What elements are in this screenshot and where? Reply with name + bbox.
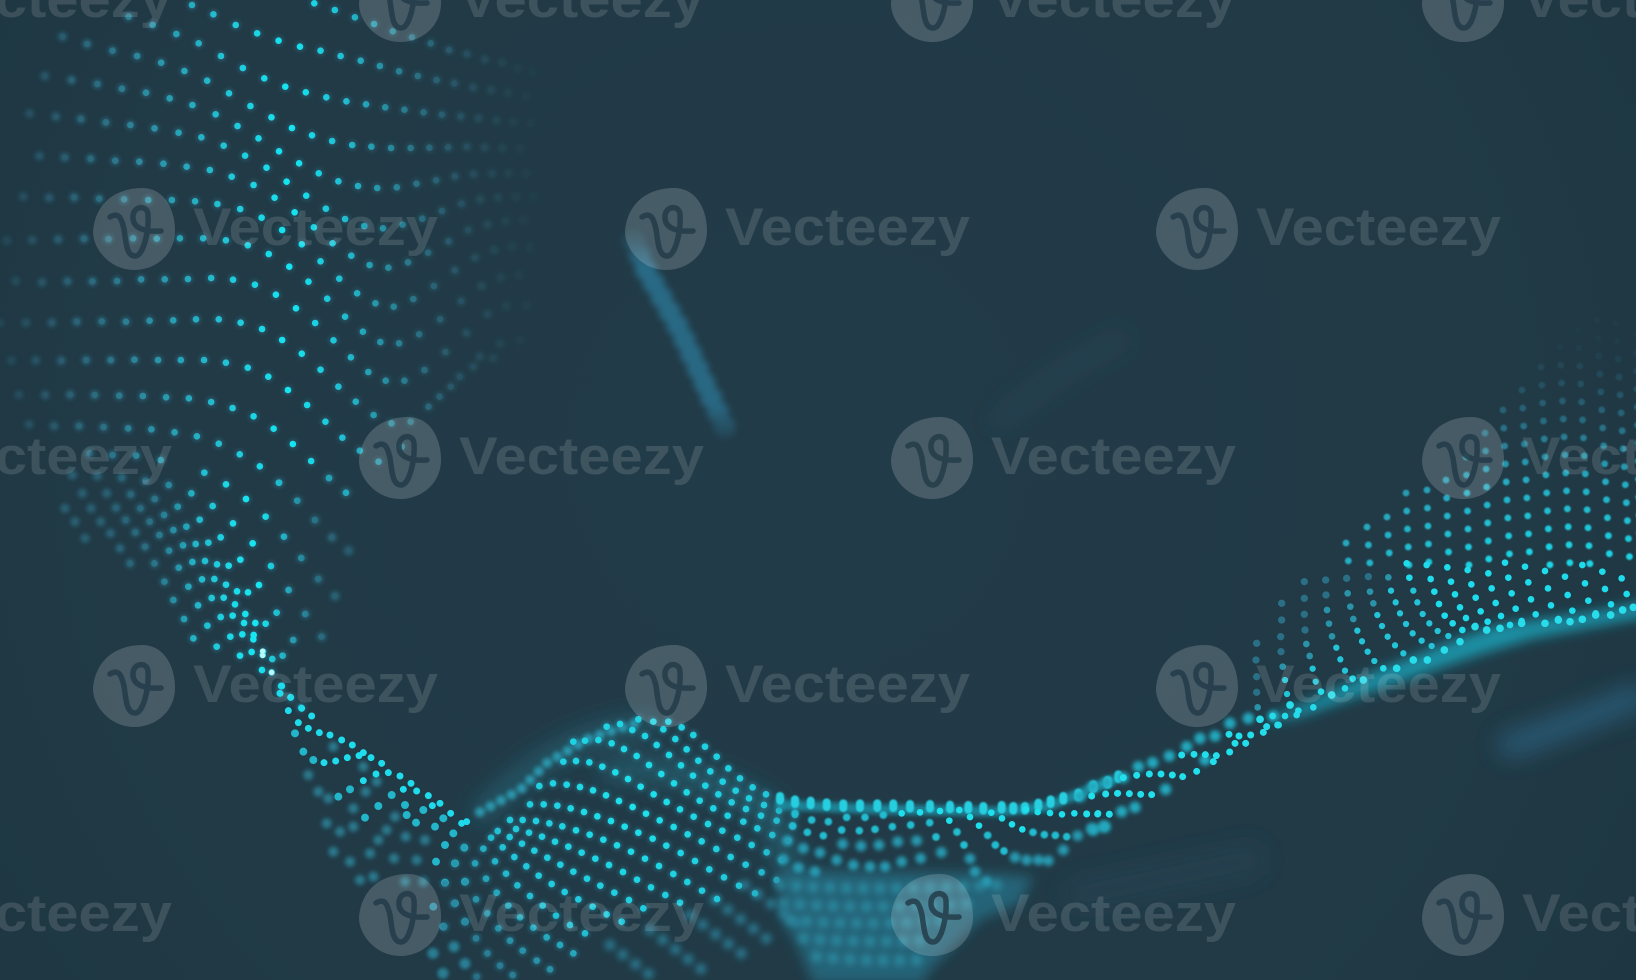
- left sheet edge dots: [280, 686, 467, 927]
- watermark row 5: Vecteezy: [459, 884, 705, 943]
- watermark row 1: [0, 0, 1636, 42]
- blurred diagonal dot streak: [634, 240, 727, 432]
- watermark row 2: [93, 188, 1502, 270]
- watermark row 4: Vecteezy: [1256, 655, 1502, 714]
- dot field: converging chevrons to the narrow ridge: [65, 473, 349, 707]
- watermark row 5: Vecteezy: [991, 884, 1237, 943]
- blurred layer of the central hump: [432, 719, 795, 977]
- faint blurred bands: [1000, 340, 1636, 895]
- watermark row 3: Vecteezy: [991, 427, 1237, 486]
- watermark row 2: Vecteezy: [193, 198, 439, 257]
- lower-right blurred plume: [780, 870, 1033, 980]
- watermark row 5: [0, 874, 1636, 956]
- dot field: right fan lower arcs and ridge: [1256, 563, 1633, 732]
- watermark row 3: Vecteezy: [459, 427, 705, 486]
- scalloped rows under the lower ridge: [780, 774, 1118, 851]
- blurred far dots of upper-left sheet: [0, 3, 533, 707]
- dim blurred lower rows of the hump: [610, 885, 800, 975]
- watermark row 4: Vecteezy: [725, 655, 971, 714]
- dot field: right fan upper columns: [1346, 320, 1636, 566]
- dot field: upper-left wave sheet: [0, 3, 533, 493]
- blurred back edge of the hump: [480, 722, 640, 812]
- blurred dots of the ridge link: [1080, 716, 1273, 830]
- sharp dots along the lower ridge: [902, 793, 1117, 829]
- watermark row 4: Vecteezy: [193, 655, 439, 714]
- sharp dots of the ridge link: [1087, 719, 1278, 814]
- dot field: central hump: [432, 719, 795, 977]
- blurred left plume of the wave: [308, 747, 465, 973]
- plume dot rows: [780, 885, 997, 960]
- watermark row 2: Vecteezy: [725, 198, 971, 257]
- soft glow under the central hump: [480, 725, 790, 870]
- watermark row 2: Vecteezy: [1256, 198, 1502, 257]
- right ridge glow: [1260, 602, 1636, 723]
- soft under-ridge rows: [780, 780, 1113, 882]
- watermark row 4: [93, 645, 1502, 727]
- watermark row 3: [0, 417, 1636, 499]
